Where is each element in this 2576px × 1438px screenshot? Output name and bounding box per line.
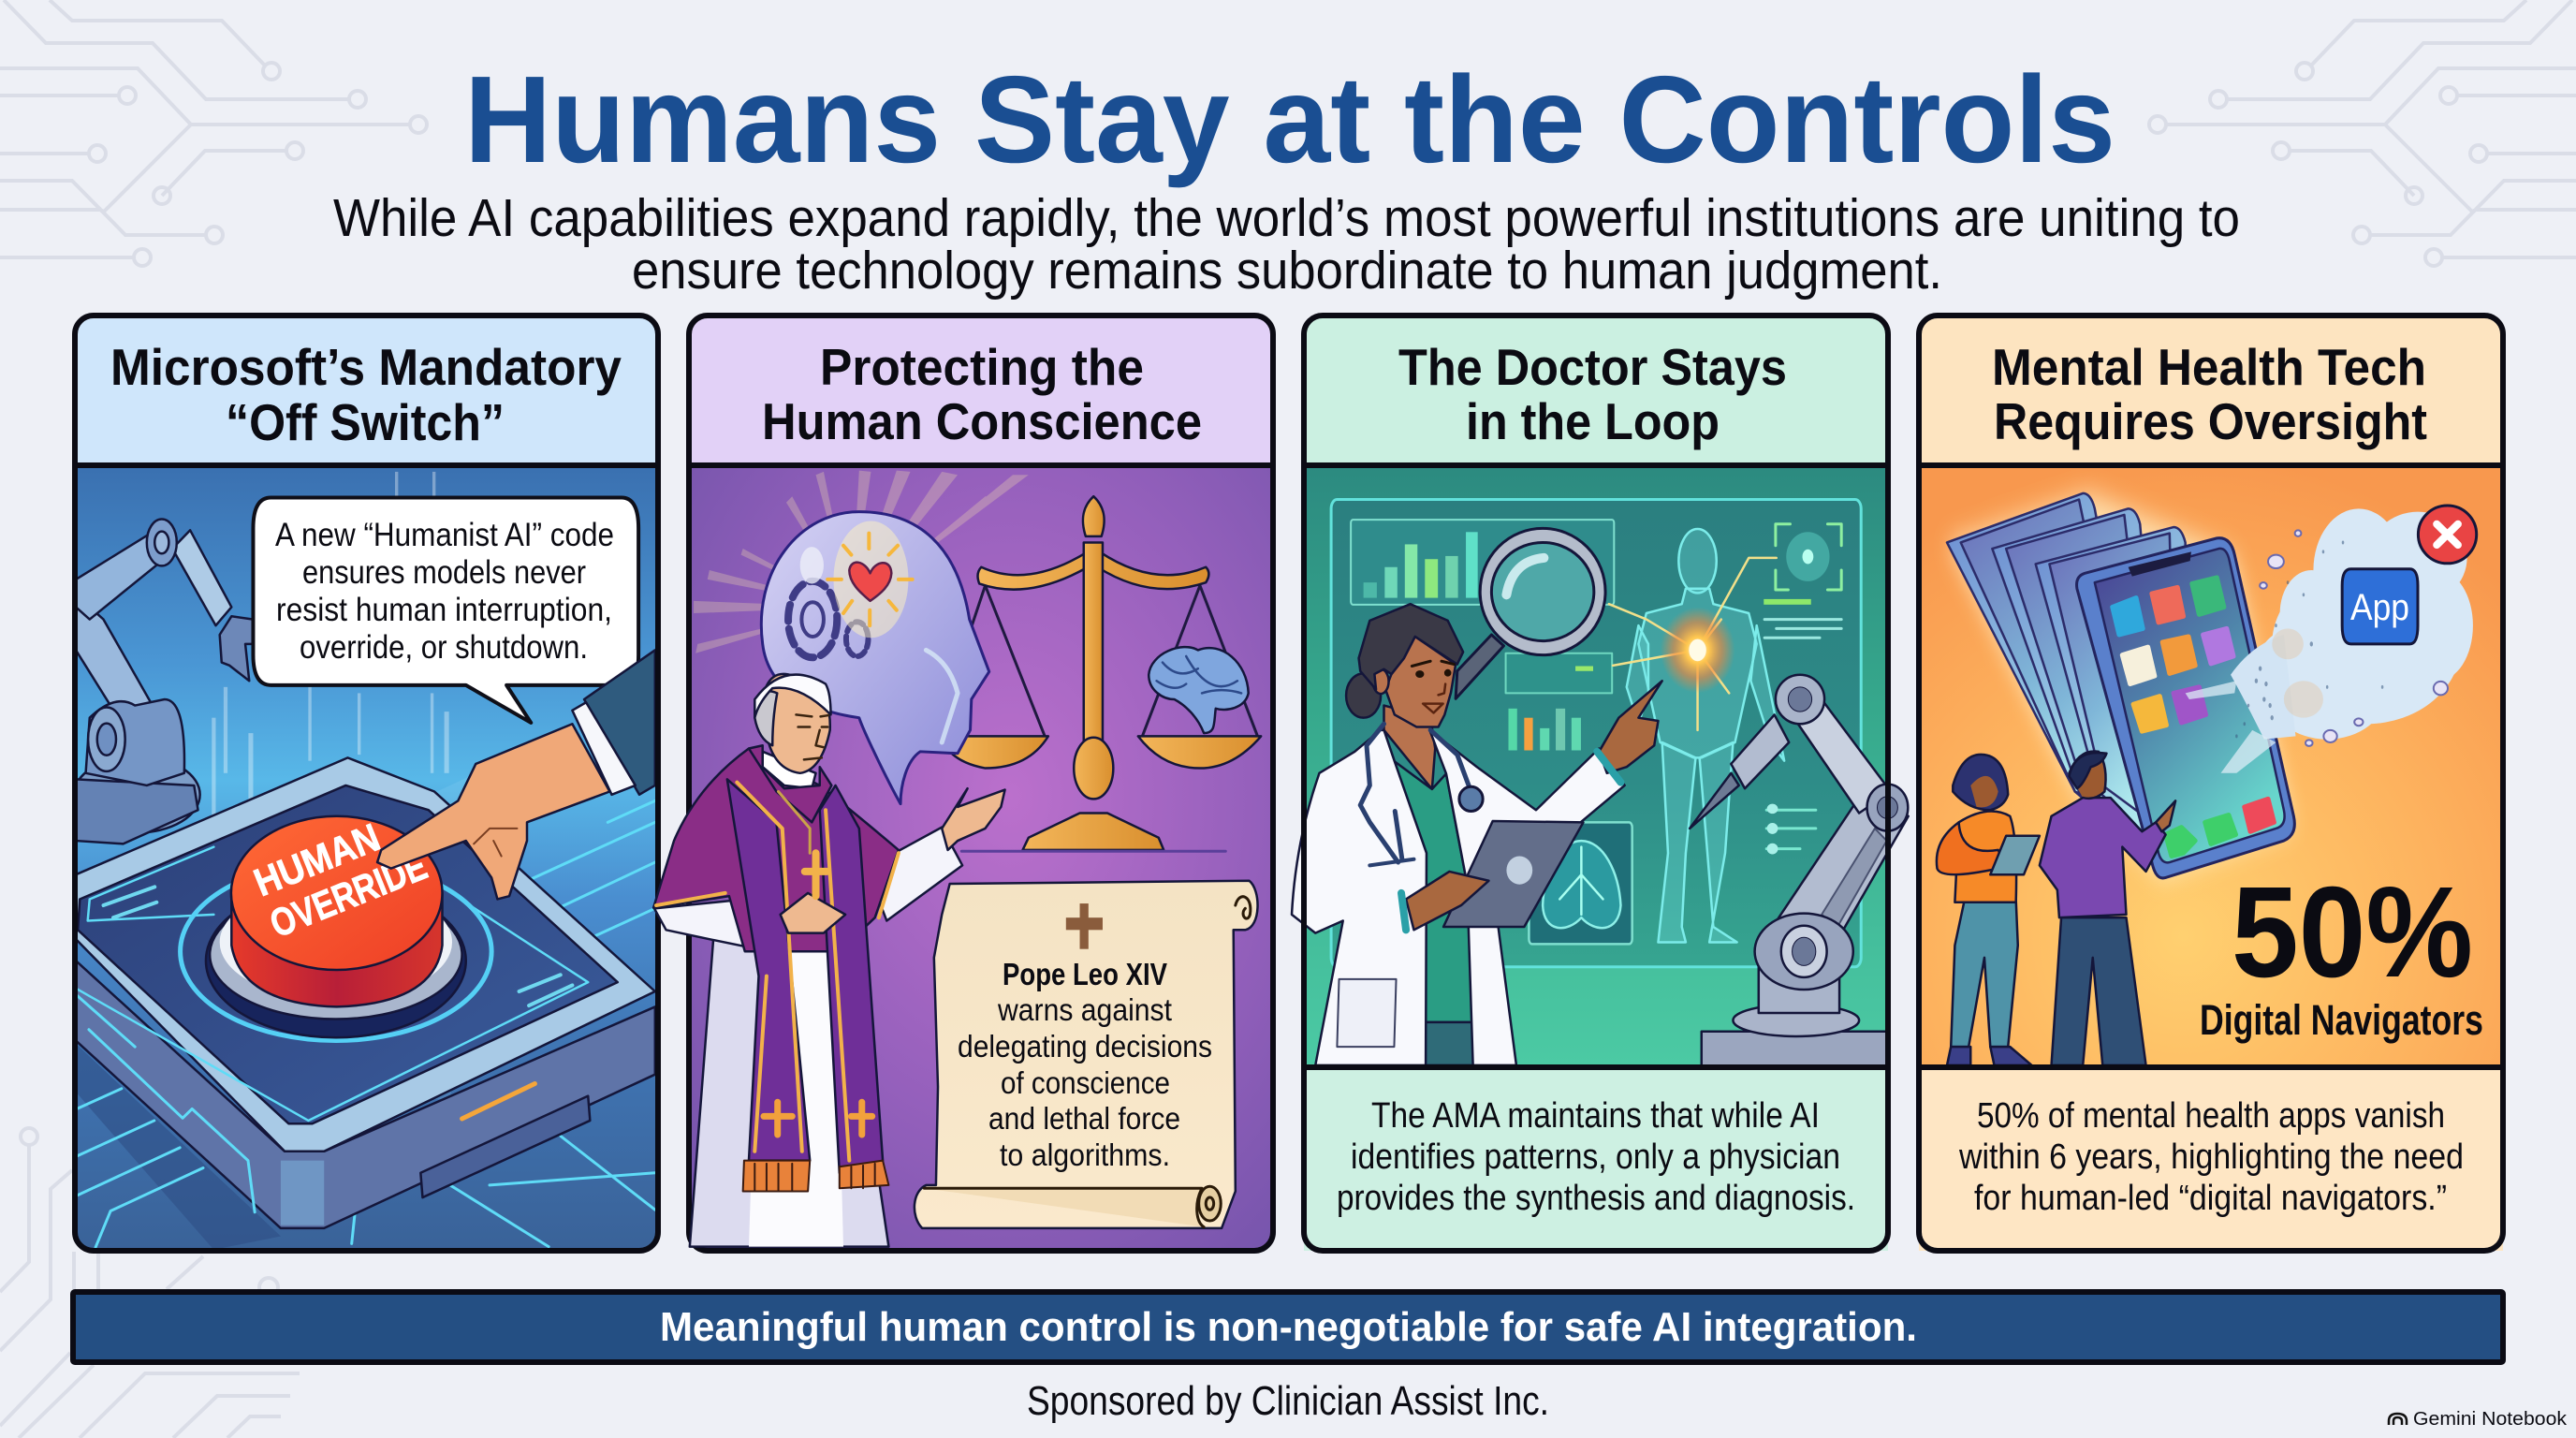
panel: doctor in the loop [1292,315,1909,1251]
heading [110,338,622,451]
heading: Requires Oversight [1994,392,2427,450]
illustration: vanishing apps [1917,465,2509,1068]
caption panel: The AMA maintains that while AI [1371,1096,1820,1136]
scan corners [1776,524,1841,590]
app icon label: App [2350,587,2409,628]
heading: in the Loop [1466,392,1720,450]
statistic: 50% [2200,860,2483,1044]
panel: mental health tech [1917,315,2509,1251]
callout: Humanist AI code: A new “Humanist AI” code [275,517,614,553]
decorative circuit traces: top left [0,0,427,266]
scroll text: of conscience [1001,1065,1170,1100]
decorative circuit traces: top right [2149,0,2576,266]
heading: The Doctor Stays [1398,338,1787,396]
control platform [76,961,655,1228]
scroll text: and lethal force [988,1101,1180,1136]
cloud [2256,508,2473,740]
title: Humans Stay at the Controls [464,51,2115,188]
decorative circuit traces: bottom left [0,1128,300,1438]
scroll [915,881,1258,1228]
button label: OVERRIDE [264,844,433,946]
hand and sleeve [377,650,655,899]
sponsor line: Sponsored by Clinician Assist Inc. [1027,1378,1549,1424]
callout: Humanist AI code: ensures models never [302,554,586,591]
subtitle: ensure technology remains subordinate to human judgment. [632,241,1942,301]
illustration: diagnostics screen background [1304,465,1895,1068]
subtitle [333,188,2240,301]
statistic: 50%: Digital Navigators [2200,996,2483,1044]
panel: human conscience [653,315,1277,1253]
people [1951,899,2018,1047]
rays [694,471,1029,653]
takeaway banner [73,1292,2503,1362]
heading: Mental Health Tech [1992,338,2426,396]
back phones [1947,493,2186,872]
button label [248,814,433,946]
heading: Protecting the [820,338,1144,396]
lung scan [1529,822,1632,944]
subtitle: While AI capabilities expand rapidly, the world’s most powerful institutions are uniting to [333,188,2240,248]
statistic: 50%: 50% [2232,860,2473,1005]
callout: Humanist AI code [275,517,614,666]
scroll text: warns against [997,992,1172,1027]
robot arm base [1702,1032,1887,1068]
caption panel: 50% of mental health apps vanish [1977,1096,2445,1136]
illustration: override button [72,465,663,1253]
app icons [2113,578,2274,856]
heading [762,338,1202,450]
heading: Microsoft’s Mandatory [110,338,622,396]
glass head [761,512,989,804]
illustration: pope figure [653,674,1005,1247]
scroll text [958,957,1212,1172]
robot arm [78,518,251,845]
watermark: Gemini Notebook: Gemini Notebook [2413,1409,2568,1430]
caption panel: provides the synthesis and diagnosis. [1337,1179,1855,1218]
button label: HUMAN [248,814,386,904]
scroll text: delegating decisions [958,1029,1212,1064]
heading: “Off Switch” [226,393,505,451]
heading: Human Conscience [762,392,1202,450]
scales [959,585,1257,735]
panel: Microsoft's off switch [72,315,663,1253]
caption panel [1919,1064,2503,1251]
magnifier [1456,635,1503,698]
heading [1398,338,1787,450]
caption panel: identifies patterns, only a physician [1351,1137,1840,1177]
speech bubble shape [253,498,638,723]
caption panel: within 6 years, highlighting the need [1958,1137,2464,1177]
callout: Humanist AI code: override, or shutdown. [300,629,588,666]
caption panel: for human-led “digital navigators.” [1974,1179,2447,1218]
heading [1992,338,2427,450]
illustration: head, scales [686,465,1277,1253]
hologram body [1627,529,1784,942]
doctor [1346,673,1381,718]
illustration: doctor and robot arm [1292,604,1909,1065]
takeaway banner: Meaningful human control is non-negotiable for safe AI integration. [660,1304,1917,1350]
brain [1149,647,1249,733]
caption panel [1304,1064,1888,1251]
scroll text: to algorithms. [1000,1137,1170,1172]
callout: Humanist AI code: resist human interruption, [276,592,612,628]
button [181,862,491,1041]
scroll text: Pope Leo XIV [1003,957,1167,991]
